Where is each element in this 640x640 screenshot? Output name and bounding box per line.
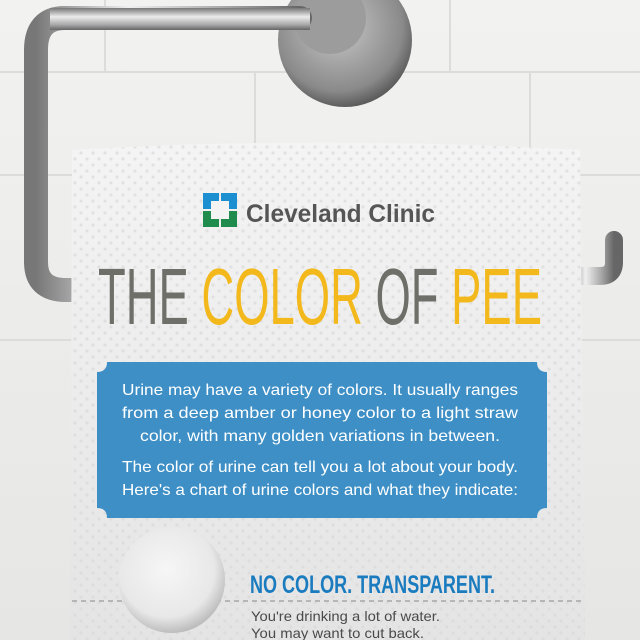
intro box xyxy=(97,362,547,518)
dashed divider xyxy=(72,600,585,602)
intro text: color, with many golden variations in between. xyxy=(140,428,500,445)
entry: no color xyxy=(250,571,495,640)
logo: Cleveland Clinic xyxy=(203,193,435,228)
entry: no color: NO COLOR. TRANSPARENT. xyxy=(250,571,495,599)
intro text: from a deep amber or honey color to a light straw xyxy=(122,405,518,422)
toilet paper holder xyxy=(36,0,614,290)
toilet paper sheet xyxy=(70,142,585,640)
intro text xyxy=(122,382,518,499)
intro text: Here's a chart of urine colors and what they indicate: xyxy=(122,482,518,499)
entry: no color: You're drinking a lot of water. xyxy=(251,608,440,624)
intro text: The color of urine can tell you a lot about your body. xyxy=(122,459,518,476)
logo: Cleveland Clinic: Cleveland Clinic xyxy=(246,200,435,228)
icon xyxy=(203,193,237,227)
color swatch: transparent xyxy=(119,527,225,633)
title: THE COLOR OF PEE xyxy=(98,252,542,341)
intro text: Urine may have a variety of colors. It usually ranges xyxy=(122,382,518,399)
